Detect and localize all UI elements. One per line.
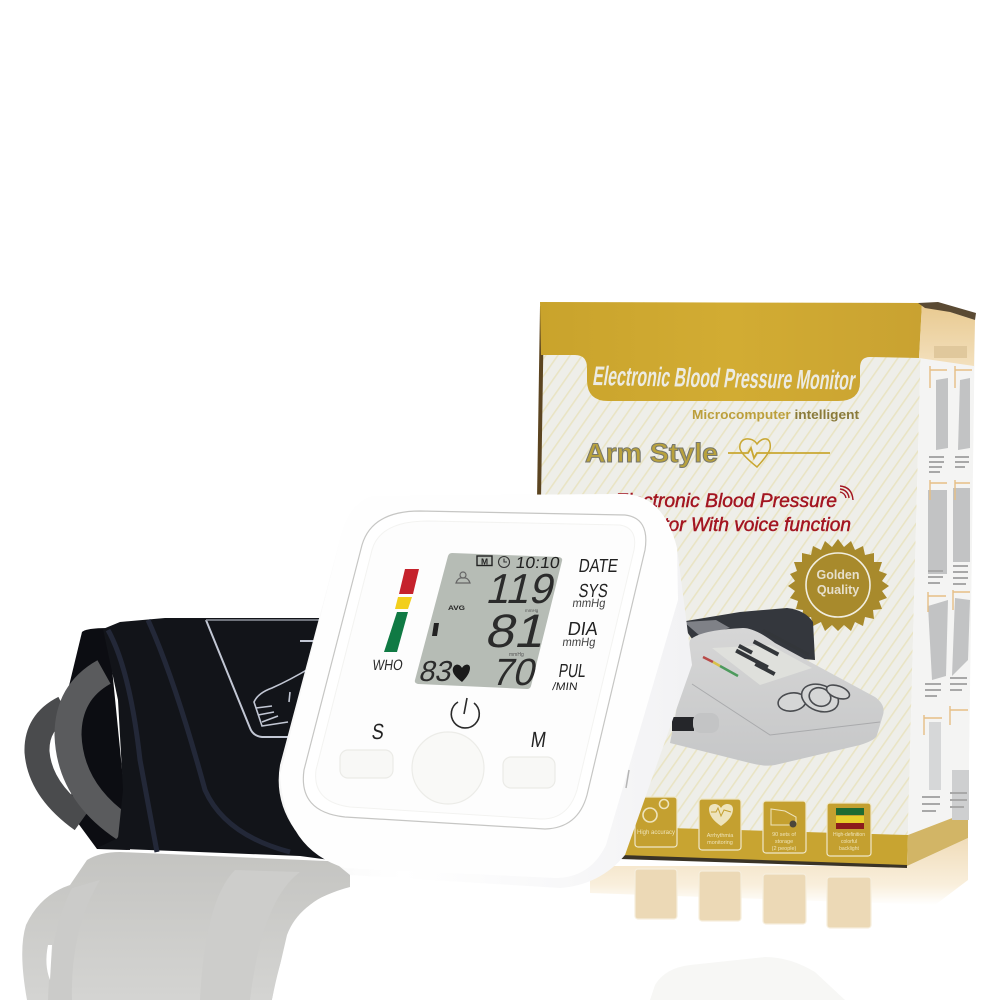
arm cuff [97, 618, 330, 860]
icon: heart with pulse line [728, 439, 830, 467]
pulse reading: 70 [489, 652, 541, 694]
mini digits [735, 629, 809, 676]
diastolic unit: mmHg [509, 652, 524, 658]
feature tile: backlight: backlight [839, 846, 859, 852]
voice function text: Monitor With voice function [622, 515, 851, 536]
WHO indicator: WHO [371, 657, 404, 674]
mini hose port [672, 717, 694, 731]
monitor front rim [280, 494, 678, 878]
golden quality seal: Quality [817, 583, 859, 597]
side instruction panels [922, 366, 972, 820]
monitor face [303, 511, 646, 829]
feature tile: arrhythmia [699, 799, 741, 850]
floor reflection: cuff [22, 852, 350, 1000]
bottom gold band [600, 826, 908, 866]
M button [503, 727, 555, 788]
air hose [37, 672, 124, 828]
mini buttons [777, 679, 851, 717]
icon: heart [453, 665, 470, 682]
LCD screen [415, 553, 562, 694]
reflected icon tiles [635, 869, 871, 928]
feature tile: memory: storage [775, 839, 793, 845]
S button: S [370, 719, 386, 744]
blood pressure monitor [279, 494, 692, 888]
voice function text: Electronic Blood Pressure [615, 491, 837, 512]
side labels: mmHg [562, 635, 597, 649]
side gold top [919, 303, 975, 366]
clock reading: 10:10 [514, 554, 561, 572]
memory flag: M [481, 556, 488, 566]
icon: user [456, 572, 470, 583]
feature tile: backlight: High-definition [833, 832, 865, 838]
box front face [540, 302, 922, 866]
cuff back fold [68, 628, 130, 850]
box inner dark edge [537, 306, 544, 500]
level marker [432, 623, 439, 636]
floor reflection: monitor [272, 888, 640, 1000]
diastolic reading: 81 [481, 606, 552, 658]
feature tile: high accuracy [635, 797, 677, 847]
icon: clock [498, 556, 510, 568]
voice function text [615, 491, 851, 536]
side labels: mmHg [572, 596, 607, 610]
body seam [626, 770, 629, 788]
average label: AVG [448, 606, 465, 612]
arm style heading: Arm Style [585, 438, 718, 468]
box side face [907, 303, 975, 866]
side label [934, 346, 967, 358]
feature tile: memory: 90 sets of [772, 832, 796, 838]
floor reflection: box [590, 838, 968, 928]
cuff printed marker outline [206, 620, 300, 737]
side labels: DATE [577, 556, 619, 577]
side labels [552, 556, 619, 693]
bottom edge shadow [620, 855, 907, 868]
side labels: PUL [557, 661, 587, 682]
monitor body [279, 494, 692, 888]
side gold band [907, 812, 968, 866]
gold header [540, 302, 922, 401]
packaging box [537, 302, 976, 868]
icon: power [451, 698, 479, 728]
feature tile: memory: (2 people) [772, 846, 797, 852]
side labels: /MIN [552, 681, 578, 693]
feature tile: arrhythmia: Arrhythmia [707, 833, 734, 839]
golden quality seal: Golden [816, 568, 860, 582]
feature tile: high accuracy: High accuracy [637, 830, 675, 836]
golden quality seal [788, 539, 889, 631]
product photo on box [670, 608, 884, 766]
power button [412, 732, 484, 804]
icon: sound waves [840, 486, 853, 500]
side labels: SYS [577, 581, 609, 602]
memory flag [477, 556, 492, 566]
icon: hand on cuff [254, 668, 310, 726]
M button: M [529, 727, 548, 752]
memory pulse: 83 [416, 655, 456, 688]
mini screen [712, 645, 812, 685]
side labels: DIA [566, 619, 599, 640]
mini monitor body [670, 628, 884, 766]
feature tile: backlight [827, 803, 871, 856]
box top flap [918, 302, 976, 320]
WHO indicator [371, 569, 419, 674]
systolic unit: mmHg [525, 608, 539, 613]
mini indicator bar [703, 657, 738, 676]
feature tile: memory [763, 801, 806, 853]
floor reflection: monitor shadow [650, 957, 845, 1000]
feature tile: backlight: colorful [841, 839, 857, 845]
feature tile: arrhythmia: monitoring [707, 840, 733, 846]
systolic reading: 119 [483, 566, 560, 613]
subtitle: Microcomputer intelligent [692, 407, 860, 422]
feature icons [635, 797, 871, 856]
mini cuff [680, 608, 815, 660]
S button [340, 719, 393, 778]
